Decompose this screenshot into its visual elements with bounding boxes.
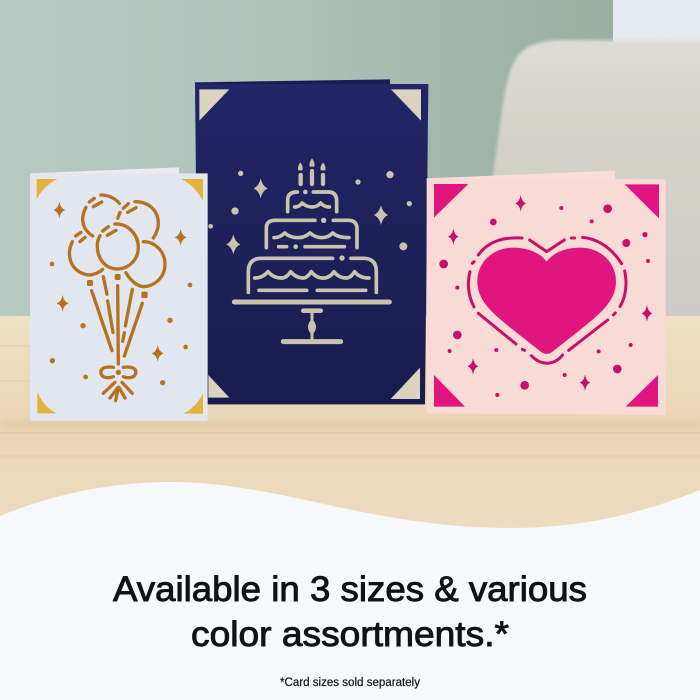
icon: three-tier cake on stand xyxy=(234,158,389,342)
heart dots and sparkles xyxy=(439,195,652,397)
white wave footer panel xyxy=(0,482,700,700)
photo background: wall, sofa and table xyxy=(0,0,700,540)
icon: balloon bouquet xyxy=(70,195,165,401)
heart corner cut-outs xyxy=(434,184,659,407)
heading: color assortments.* xyxy=(191,615,509,654)
cake corner cut-outs xyxy=(199,89,421,399)
balloon dots and sparkles xyxy=(50,202,192,385)
card: pink heart xyxy=(427,171,666,415)
cake dots and sparkles xyxy=(208,171,412,261)
heading: Available in 3 sizes & various xyxy=(113,570,587,609)
footnote: *Card sizes sold separately xyxy=(280,677,420,689)
card: navy birthday cake xyxy=(195,79,428,404)
balloon corner cut-outs xyxy=(37,179,203,414)
heading xyxy=(113,570,587,654)
card: white balloons xyxy=(30,167,208,421)
heart dashed outline xyxy=(468,237,626,363)
icon: large heart xyxy=(477,248,616,354)
